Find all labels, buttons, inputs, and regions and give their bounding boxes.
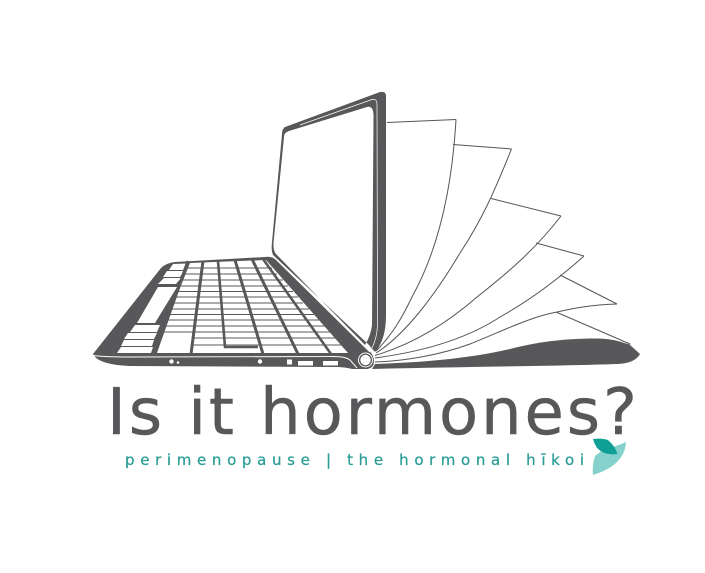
lid highlight line — [300, 99, 378, 348]
hinge circle — [358, 353, 372, 367]
keyboard column separators — [155, 259, 331, 354]
laptop screen lid — [272, 92, 386, 352]
book bottom cover — [372, 338, 640, 369]
keyboard row separators — [157, 268, 342, 345]
left-hand keys — [117, 264, 187, 353]
subtitle: perimenopause | the hormonal hīkoi — [125, 451, 584, 469]
icon: leaves — [593, 439, 626, 475]
title: Is it hormones? — [107, 376, 637, 450]
base front edge highlight — [93, 259, 370, 368]
book pages fanning from laptop hinge — [375, 120, 630, 362]
base ports — [169, 359, 338, 366]
keyboard — [117, 259, 348, 354]
laptop base — [93, 257, 374, 369]
main key field — [154, 260, 348, 353]
